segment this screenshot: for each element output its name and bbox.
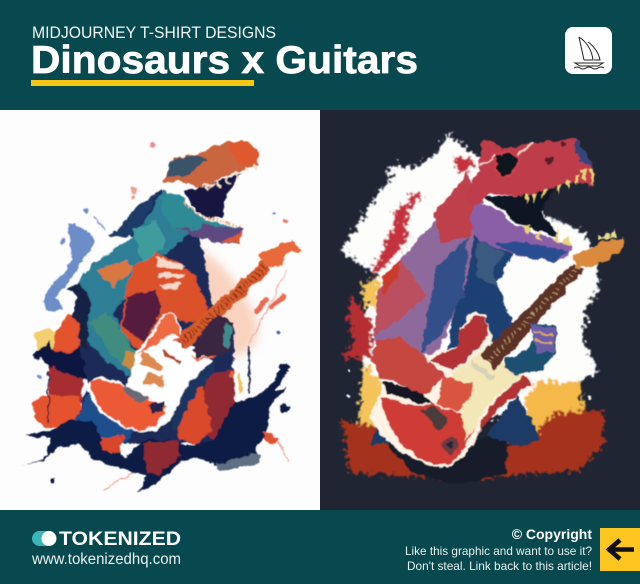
neck: [447, 207, 517, 353]
torso: [373, 173, 483, 370]
illustration: dinosaur with sunglasses and guitar on dark: [342, 134, 624, 485]
logo wordmark: TOKENIZED: [59, 529, 181, 550]
mouth: [184, 173, 240, 218]
arrow button: [600, 528, 640, 571]
panel: dark t-shirt design: [320, 110, 640, 510]
paint splashes with rough edges: [342, 134, 603, 478]
copyright line 1: Like this graphic and want to use it?: [405, 544, 592, 558]
title: Dinosaurs x Guitars: [31, 39, 418, 82]
white dots: [347, 369, 350, 373]
upper head: [163, 140, 259, 187]
subtitle: MIDJOURNEY T-SHIRT DESIGNS: [32, 24, 276, 42]
fist at guitar: [437, 377, 473, 412]
icon: Midjourney sailboat: [565, 27, 612, 74]
lower jaw: [161, 193, 245, 243]
arm: [372, 337, 473, 412]
copyright line 2: Don't steal. Link back to this article!: [407, 559, 592, 573]
guitar body: [370, 313, 532, 467]
logo: Tokenized: [31, 529, 181, 568]
copyright heading: © Copyright: [512, 526, 592, 542]
upper head: [467, 138, 594, 207]
mouth: [483, 187, 560, 238]
teeth: [525, 168, 593, 205]
back and neck: [79, 190, 197, 387]
copyright note: [405, 526, 592, 573]
guitar neck: [173, 261, 271, 349]
header band: [0, 0, 640, 110]
website url: www.tokenizedhq.com: [31, 551, 181, 568]
logo mark: [32, 531, 56, 546]
illustration: dinosaur with guitar on white: [23, 140, 300, 493]
bottom ink splats: [23, 363, 287, 493]
guitar body: [87, 313, 213, 431]
shadow under body: [387, 437, 507, 485]
hand: [192, 313, 233, 358]
red dashes and accents: [257, 297, 284, 312]
panel: white t-shirt design: [0, 110, 320, 510]
guitar neck: [480, 263, 583, 370]
silhouette behind body: [75, 190, 233, 443]
footer band: [0, 510, 640, 584]
legs and lower body: [370, 393, 540, 447]
sunglasses: [496, 152, 518, 177]
hand: [503, 323, 557, 375]
title underline: [31, 80, 254, 86]
lower jaw: [471, 205, 570, 262]
torso: [120, 253, 210, 353]
